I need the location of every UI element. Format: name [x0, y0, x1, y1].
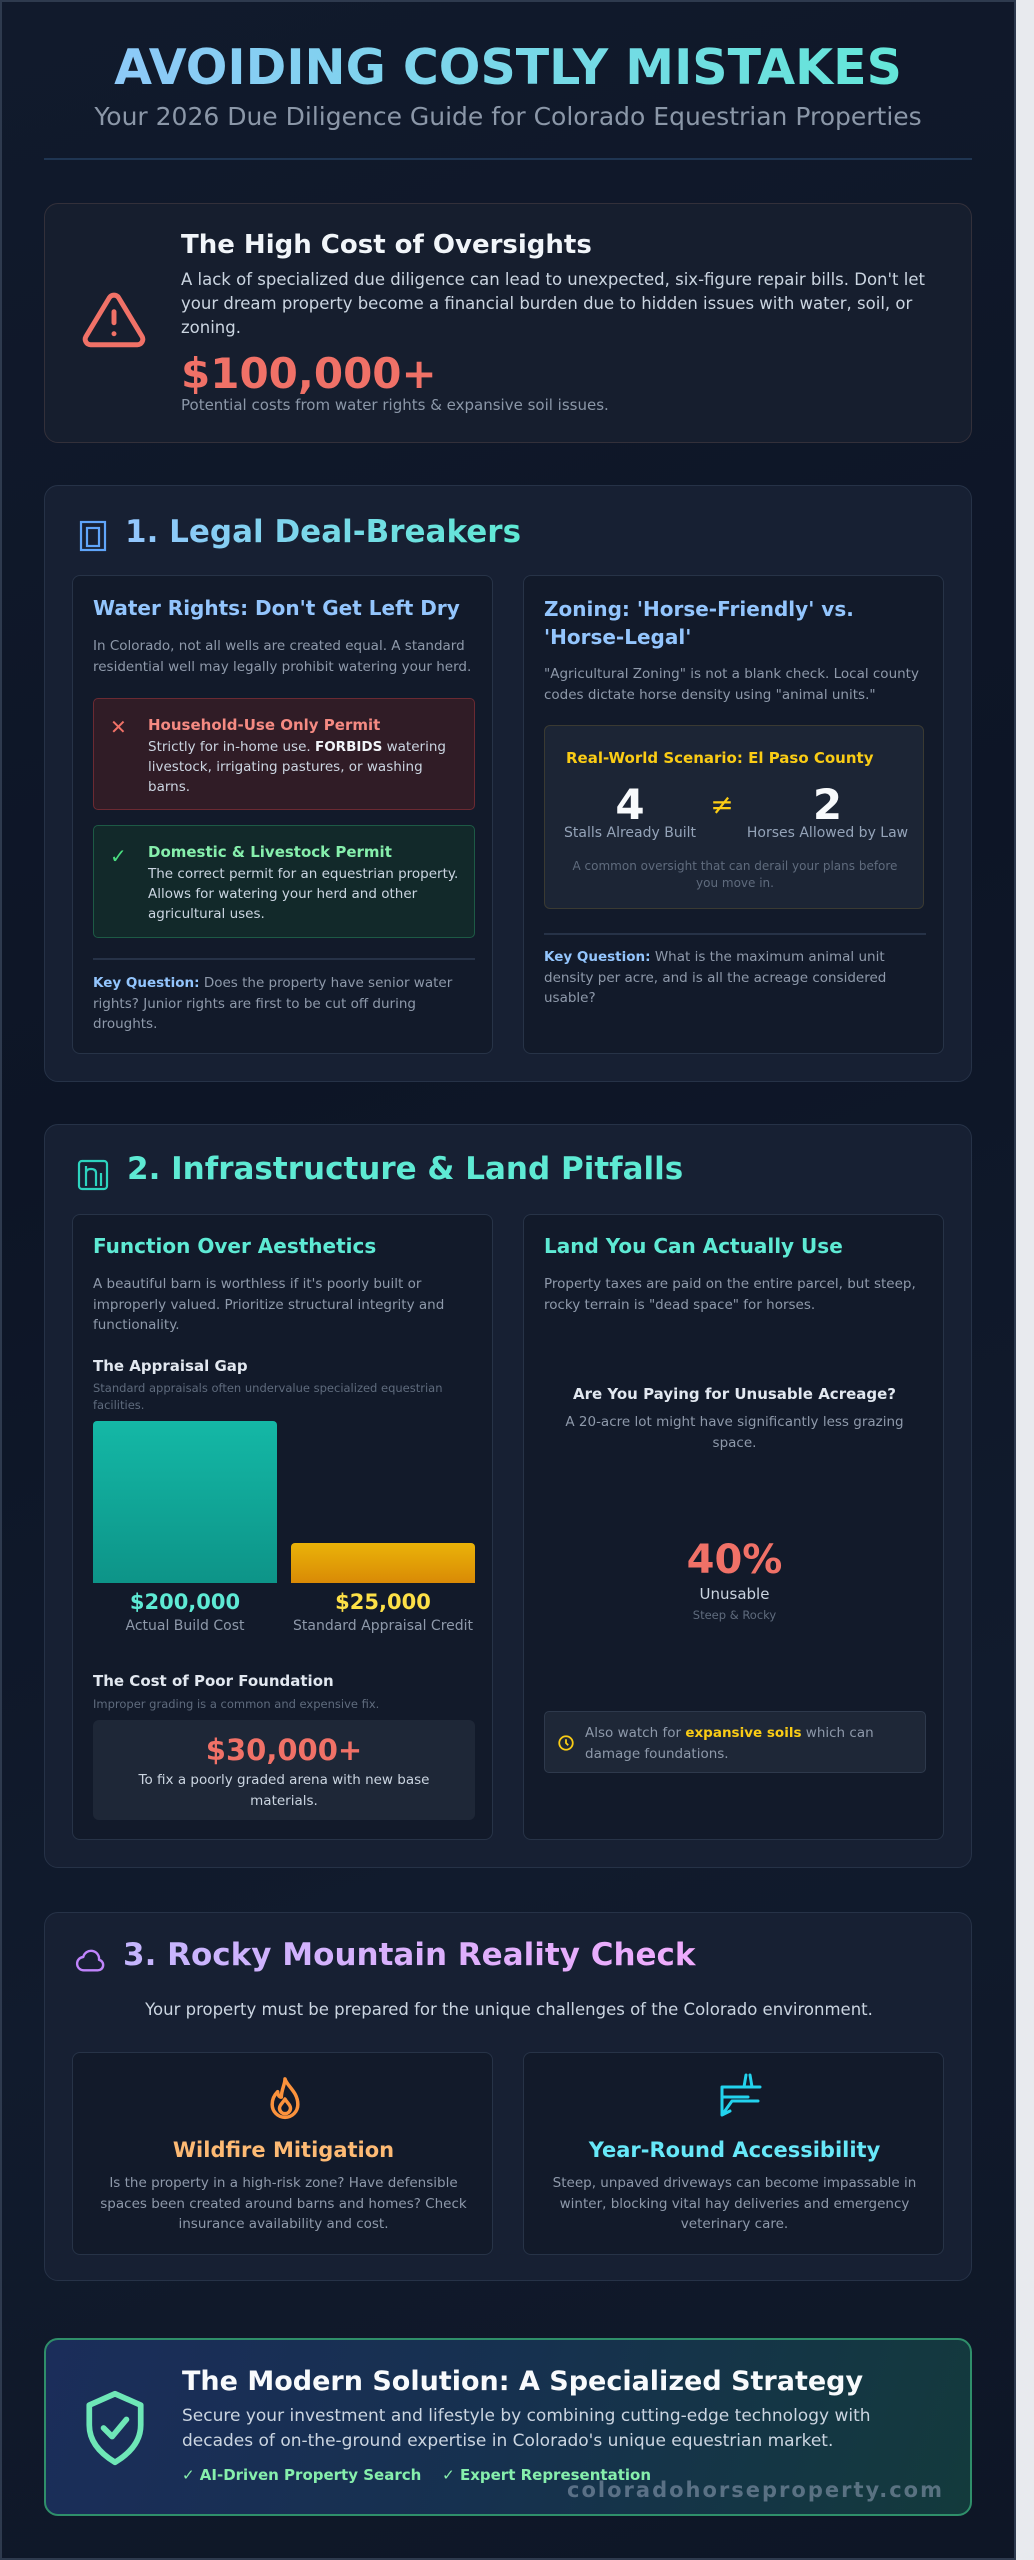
callout: household-use permit [93, 698, 475, 810]
stat: 40%: 40% [687, 1537, 782, 1583]
card: zoning [523, 575, 944, 1054]
scenario box: 4 [615, 780, 645, 829]
panel: rocky mountain: 3. Rocky Mountain Reality Check [123, 1937, 696, 1973]
card: land you can use [523, 1214, 944, 1840]
scenario box: 2 [813, 780, 842, 829]
card: water rights: Water Rights: Don't Get Left Dry [93, 596, 460, 620]
callout: domestic permit [93, 825, 475, 938]
icon: door [80, 520, 106, 552]
panel: high cost of oversights [44, 203, 972, 443]
card: land you can use: Unusable [700, 1585, 769, 1603]
card: accessibility [523, 2052, 944, 2255]
callout: $30,000+ [93, 1720, 475, 1820]
callout: domestic permit: ✓ [110, 844, 127, 868]
panel: legal deal-breakers [44, 485, 972, 1082]
heading: 1. Legal Deal-Breakers [125, 514, 521, 550]
panel: modern solution: ✓ AI-Driven Property Search ✓ Expert Representation [182, 2466, 651, 2484]
card: function over aesthetics: A beautiful barn is worthless if it's poorly built or improperly valued. Prioritize structural integrity and functionality. [93, 1276, 444, 1333]
icon: shield check [86, 2390, 144, 2466]
stat: $100,000+ [181, 349, 437, 398]
callout: domestic permit: Domestic & Livestock Permit [148, 843, 392, 861]
card: zoning: Key Question: What is the maximum animal unit density per acre, and is all the acreage considered usable? [544, 949, 886, 1006]
scenario box: ≠ [710, 788, 734, 821]
card: land you can use: Steep & Rocky [693, 1608, 776, 1622]
panel: infrastructure: 2. Infrastructure & Land Pitfalls [127, 1151, 683, 1187]
card: wildfire: Is the property in a high-risk zone? Have defensible spaces been created around barns and homes? Check insurance availability and cost. [100, 2175, 467, 2232]
callout: household-use permit: Household-Use Only Permit [148, 716, 380, 734]
icon: flame [270, 2077, 300, 2120]
callout: household-use permit: ✕ [110, 715, 127, 739]
panel: infrastructure [44, 1124, 972, 1868]
card: function over aesthetics: Improper grading is a common and expensive fix. [93, 1697, 379, 1711]
card: zoning: Zoning: 'Horse-Friendly' vs. 'Horse-Legal' [544, 597, 854, 649]
scenario box: Horses Allowed by Law [747, 825, 908, 841]
panel: rocky mountain [44, 1912, 972, 2281]
caption: Potential costs from water rights & expansive soil issues. [181, 396, 609, 414]
bar chart: $200,000 [130, 1590, 240, 1614]
card: function over aesthetics: Standard appraisals often undervalue specialized equestrian facilities. [93, 1381, 443, 1412]
card: accessibility: Year-Round Accessibility [589, 2138, 880, 2162]
card: accessibility: Steep, unpaved driveways can become impassable in winter, blocking vital hay deliveries and emergency veterinary care. [553, 2175, 916, 2232]
card: water rights [72, 575, 493, 1054]
card: function over aesthetics [72, 1214, 493, 1840]
panel: rocky mountain: Your property must be prepared for the unique challenges of the Colorado environment. [145, 2000, 873, 2019]
icon: snowplow [720, 2074, 762, 2117]
bar chart: $25,000 [335, 1590, 431, 1614]
callout: household-use permit: Strictly for in-home use. FORBIDS watering livestock, irrigating pastures, or washing barns. [148, 739, 446, 795]
card: water rights: In Colorado, not all wells are created equal. A standard residential well may legally prohibit watering your herd. [93, 638, 471, 675]
callout: $30,000+: $30,000+ [206, 1733, 362, 1767]
callout: expansive soils: Also watch for expansive soils which can damage foundations. [585, 1725, 874, 1762]
callout: domestic permit: The correct permit for an equestrian property. Allows for watering your herd and other agricultural uses. [148, 866, 458, 922]
bar chart: Standard Appraisal Credit [293, 1618, 473, 1634]
bar chart [93, 1421, 475, 1634]
card: zoning: "Agricultural Zoning" is not a blank check. Local county codes dictate horse density using "animal units." [544, 666, 919, 702]
card: land you can use: Property taxes are paid on the entire parcel, but steep, rocky terrain is "dead space" for horses. [544, 1276, 916, 1312]
card: function over aesthetics: Function Over Aesthetics [93, 1234, 376, 1258]
title: AVOIDING COSTLY MISTAKES [114, 39, 902, 96]
subtitle: Your 2026 Due Diligence Guide for Colorado Equestrian Properties [94, 102, 922, 131]
scenario box: Stalls Already Built [564, 825, 696, 841]
callout: expansive soils [544, 1711, 926, 1773]
card: land you can use: A 20-acre lot might have significantly less grazing space. [565, 1414, 904, 1450]
icon: barn [78, 1160, 108, 1190]
scenario box: A common oversight that can derail your plans before you move in. [573, 859, 897, 890]
bar chart: Actual Build Cost [125, 1618, 245, 1634]
card: land you can use: Land You Can Actually Use [544, 1234, 843, 1258]
watermark: coloradohorseproperty.com [567, 2478, 944, 2502]
card: wildfire: Wildfire Mitigation [173, 2138, 394, 2162]
card: land you can use: Are You Paying for Unusable Acreage? [573, 1385, 896, 1403]
text block: A lack of specialized due diligence can lead to unexpected, six-figure repair bills. Don't let your dream property become a financial burden due to hidden issues with water, soil, or zoning. [181, 270, 925, 337]
card: function over aesthetics: The Cost of Poor Foundation [93, 1672, 334, 1690]
title [0, 36, 1016, 100]
panel: modern solution [44, 2338, 972, 2516]
scenario box: Real-World Scenario: El Paso County [566, 749, 874, 767]
heading: The High Cost of Oversights [181, 230, 592, 260]
icon: cloud [76, 1950, 104, 1972]
scenario box [544, 725, 924, 909]
card: wildfire [72, 2052, 493, 2255]
icon: warning [82, 292, 146, 348]
panel: modern solution: Secure your investment and lifestyle by combining cutting-edge technology with decades of on-the-ground expertise in Colorado's unique equestrian market. [182, 2406, 871, 2451]
panel: modern solution: The Modern Solution: A Specialized Strategy [182, 2366, 863, 2397]
callout: $30,000+: To fix a poorly graded arena with new base materials. [139, 1772, 429, 1808]
card: function over aesthetics: The Appraisal Gap [93, 1357, 248, 1375]
key question: Key Question: Does the property have senior water rights? Junior rights are first to be cut off during droughts. [93, 975, 452, 1032]
